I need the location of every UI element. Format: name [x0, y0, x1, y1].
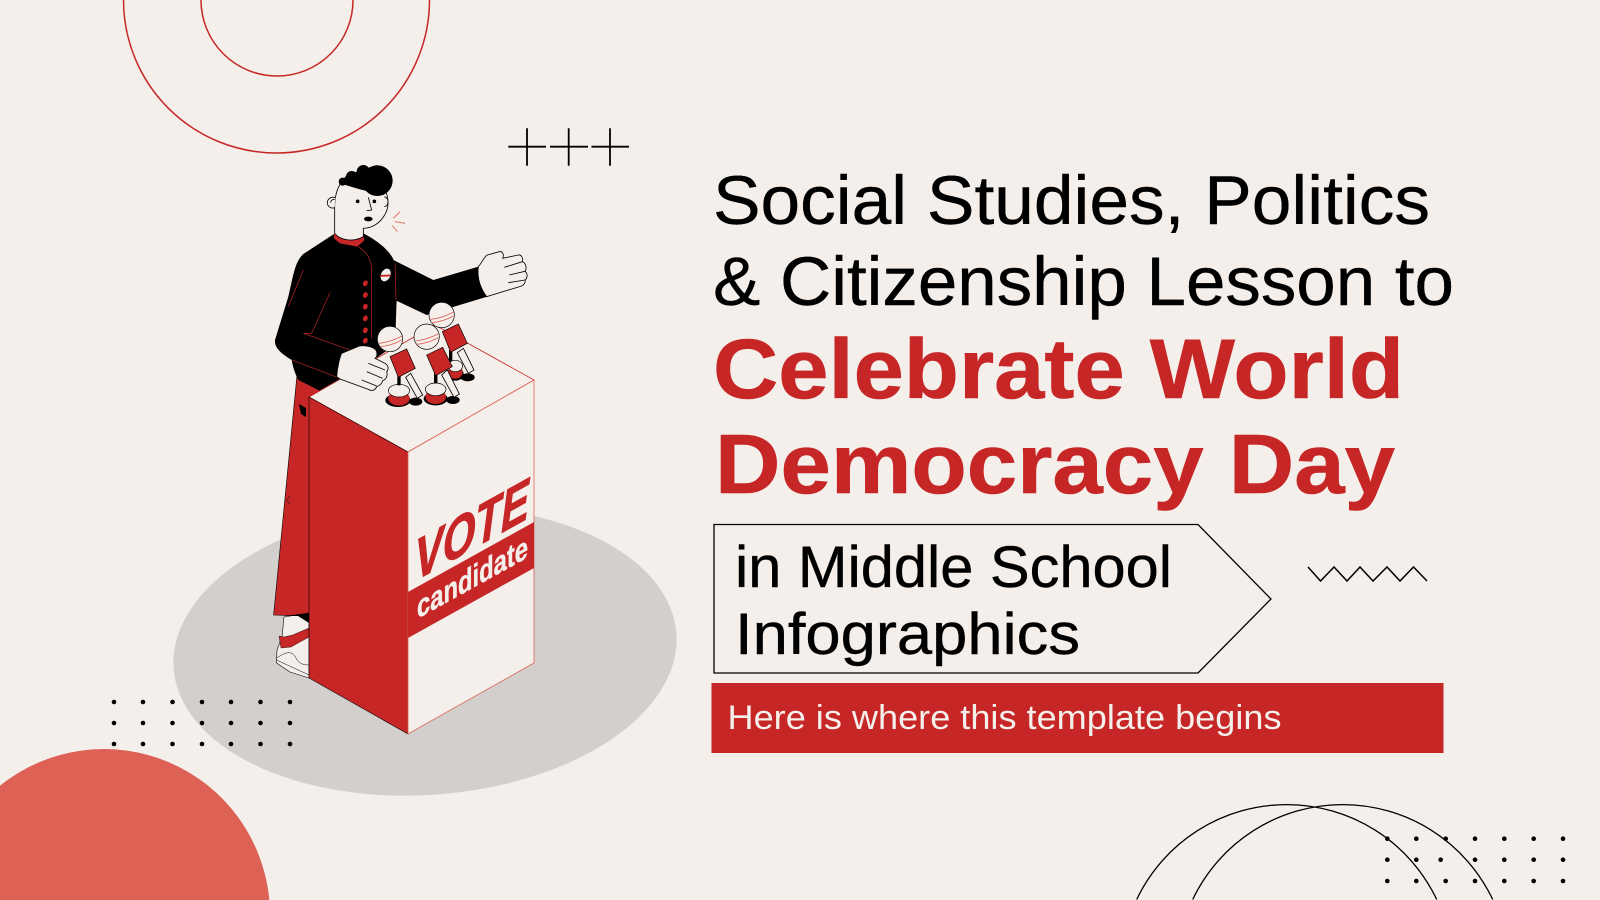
icon: extended arm [393, 260, 487, 315]
decoration: dot grid right [1385, 836, 1565, 883]
icon: raised hand [478, 252, 527, 297]
title [713, 162, 1454, 511]
subtitle banner [712, 683, 1444, 753]
icon: trouser leg and shoe [274, 375, 322, 678]
subtitle text: Here is where this template begins [728, 699, 1282, 737]
arrow text line 1: in Middle School [735, 535, 1172, 600]
icon: jacket buttons [362, 280, 369, 344]
decoration: zigzag line [1308, 567, 1427, 581]
podium [309, 325, 534, 734]
icon: campaign badge [379, 267, 393, 283]
title highlighted line 1: Celebrate World [713, 322, 1404, 416]
icon: collar [334, 233, 364, 247]
icon: front microphone [377, 326, 423, 407]
podium label: VOTE: VOTE [415, 466, 531, 594]
icon: middle microphone [414, 324, 460, 405]
icon: jacket [275, 233, 397, 392]
icon: jacket seams [288, 247, 396, 378]
podium top face [309, 325, 534, 452]
podium left red face [309, 397, 408, 734]
icon: person upper body [275, 165, 527, 392]
icon: face [356, 197, 376, 221]
illustration: speaker at voting podium [274, 165, 534, 734]
title highlighted line 2: Democracy Day [715, 417, 1395, 511]
podium right face [408, 380, 534, 734]
arrow text line 2: Infographics [735, 602, 1080, 667]
title line 2: & Citizenship Lesson to [713, 243, 1454, 320]
icon: back microphone [429, 302, 475, 381]
icon: hair [339, 165, 393, 196]
title line 1: Social Studies, Politics [713, 162, 1430, 239]
decoration: dot grid left [112, 700, 292, 746]
decoration: plus signs [508, 128, 629, 166]
icon: hand and microphones [337, 302, 475, 407]
icon: speech lines [392, 212, 405, 232]
decoration: grey ground ellipse [164, 490, 686, 812]
podium label: candidate: candidate [417, 529, 528, 626]
podium red band [408, 522, 534, 638]
icon: ears [327, 197, 388, 208]
icon: hand on podium [337, 346, 388, 390]
decoration: overlapping circles bottom right [1137, 805, 1493, 900]
decoration: coral semicircle bottom left [0, 749, 269, 900]
icon: head [335, 183, 388, 240]
arrow label box [714, 524, 1271, 673]
decoration: concentric red circles top left [124, 0, 430, 153]
